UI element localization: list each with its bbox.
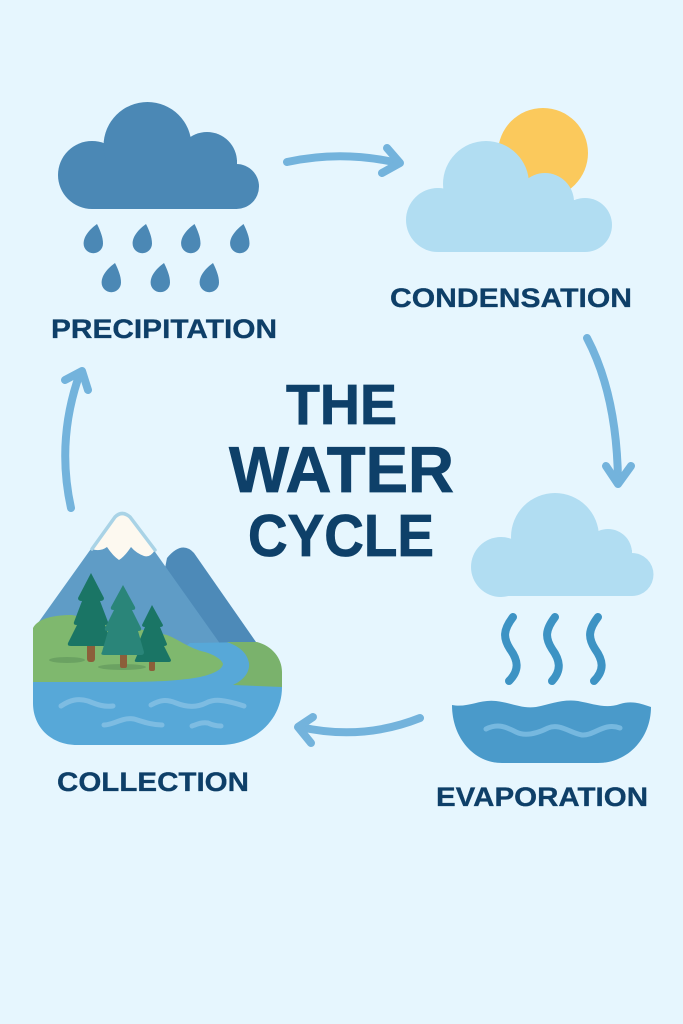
title: THE: [286, 373, 397, 437]
icon: sun behind cloud: [406, 108, 612, 252]
front mountain: [33, 512, 221, 650]
arrow: evaporation to collection: [298, 717, 420, 743]
label: condensation: CONDENSATION: [390, 283, 632, 313]
icon: rising steam: [505, 617, 602, 681]
right green land: [227, 642, 282, 687]
arrow: condensation to evaporation: [587, 338, 631, 484]
label: collection: COLLECTION: [57, 767, 249, 797]
snow cap outline: [92, 514, 155, 550]
label: evaporation: EVAPORATION: [436, 782, 648, 812]
icon: evaporation cloud: [471, 493, 654, 597]
tree left: [68, 573, 111, 662]
icon: water basin: [452, 701, 651, 763]
arrow: collection to precipitation: [65, 371, 88, 508]
tree right: [135, 605, 171, 671]
tree center: [101, 585, 144, 668]
snow cap: [92, 512, 155, 560]
label: precipitation: PRECIPITATION: [51, 314, 277, 344]
title: CYCLE: [248, 503, 434, 569]
arrow: precipitation to condensation: [287, 148, 400, 173]
water ripples: [61, 700, 244, 726]
title: [229, 373, 454, 569]
title: WATER: [229, 433, 454, 506]
back mountain: [150, 548, 256, 645]
water and river: [33, 642, 282, 745]
left green land: [33, 615, 223, 682]
tree shadows: [49, 657, 146, 670]
icon: precipitation rain cloud: [58, 102, 259, 292]
icon: collection landscape: [33, 512, 282, 745]
